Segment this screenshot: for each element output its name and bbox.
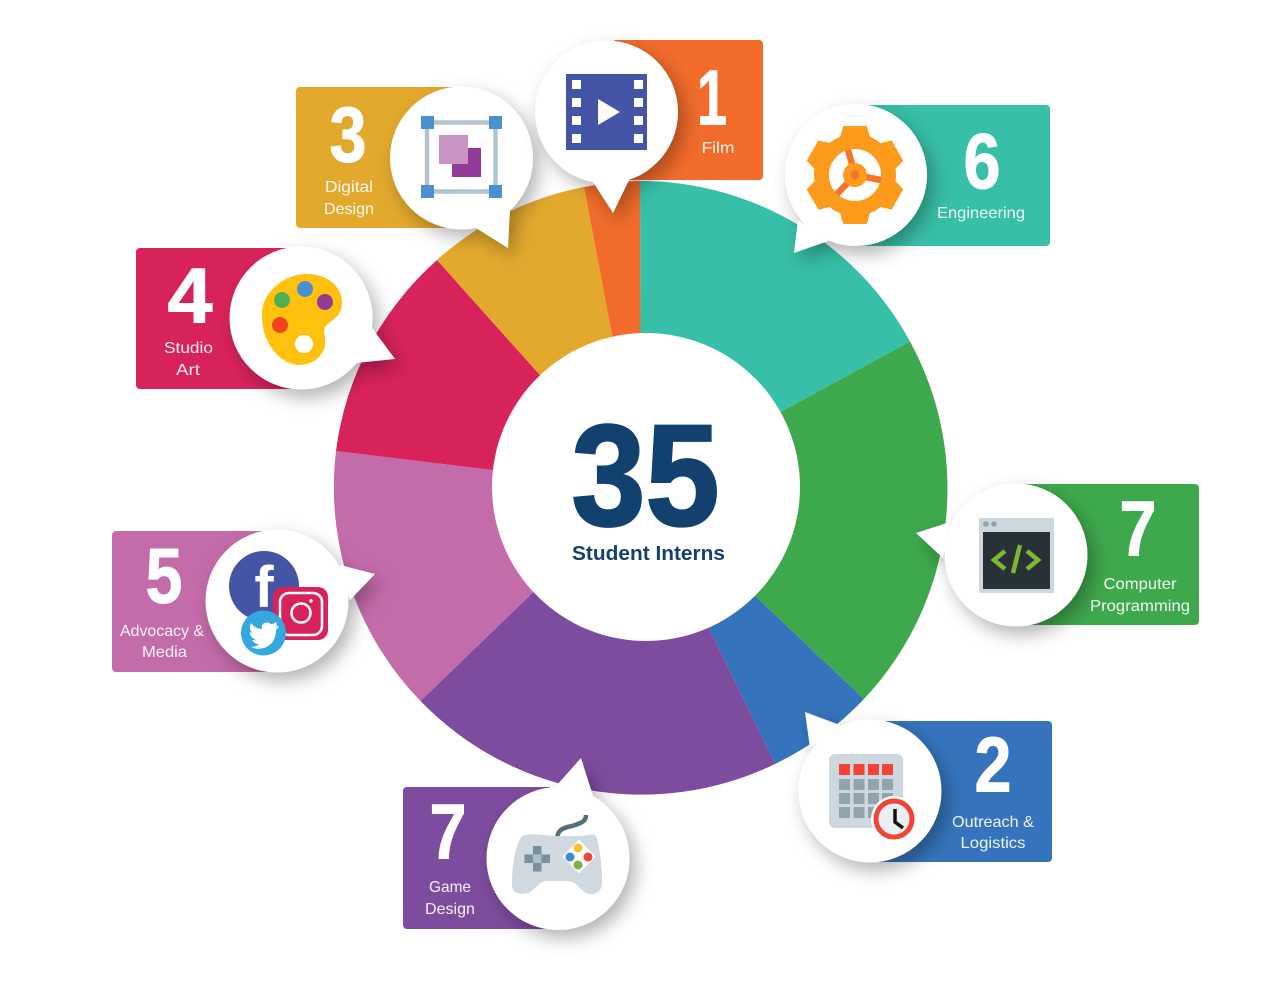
panel: advocacy and media: Advocacy & (120, 623, 204, 640)
panel: game design: 7 (430, 788, 466, 876)
bubble (390, 86, 533, 248)
panel: engineering (785, 104, 1050, 253)
panel: advocacy and media: 5 (146, 532, 182, 620)
panel: computer programming: 7 (1120, 484, 1156, 572)
panel: film: 1 (697, 54, 727, 142)
bubble (206, 530, 375, 672)
bubble (486, 758, 630, 930)
icon: social media logos (229, 551, 328, 656)
icon: paint palette (262, 274, 342, 365)
total label: Student Interns (572, 543, 725, 565)
panel: outreach and logistics: Outreach & (952, 814, 1034, 831)
panel: advocacy and media (112, 530, 375, 672)
slice: outreach and logistics (641, 488, 864, 764)
slice: studio art (336, 260, 641, 488)
slice: engineering (640, 181, 910, 488)
panel: digital design (296, 86, 533, 248)
slice: advocacy and media (334, 451, 641, 701)
panel: advocacy and media: Media (142, 644, 187, 661)
icon: gear (806, 127, 904, 223)
icon: vector shapes (421, 116, 502, 198)
panel: digital design: Digital (325, 179, 373, 196)
icon: calendar with clock (829, 754, 917, 842)
bubble (535, 40, 678, 213)
bubble (230, 246, 395, 390)
slice: film (584, 181, 641, 488)
panel: studio art: 4 (168, 252, 212, 340)
panel: game design: Game (429, 879, 471, 896)
panel: computer programming (916, 484, 1199, 626)
bubble (916, 484, 1088, 626)
panel: digital design: 3 (330, 90, 366, 178)
slice: digital design (437, 187, 641, 488)
total number: 35 (572, 395, 720, 556)
icon: film strip with play (566, 74, 647, 150)
panel: studio art (136, 246, 395, 390)
panel: studio art: Studio (164, 340, 213, 357)
panel: game design (403, 758, 630, 930)
panel: engineering: 6 (964, 117, 1000, 205)
panel: game design: Design (425, 901, 475, 918)
panel: computer programming: Computer (1104, 576, 1177, 593)
panel: outreach and logistics: Logistics (960, 835, 1026, 852)
panel: outreach and logistics: 2 (974, 720, 1012, 808)
panel: digital design: Design (324, 201, 374, 218)
bubble (798, 712, 942, 862)
icon: code window (979, 518, 1054, 593)
panel: engineering: Engineering (937, 205, 1025, 222)
panel: film: Film (702, 140, 734, 157)
center total (492, 333, 800, 641)
slice: computer programming (641, 342, 947, 699)
donut chart: 35 interns by field (334, 181, 947, 795)
icon: social media logos: f (254, 555, 274, 620)
panel: film (535, 40, 763, 213)
panel: studio art: Art (176, 362, 201, 379)
icon: game controller (512, 815, 602, 894)
bubble (785, 104, 927, 253)
panel: computer programming: Programming (1090, 598, 1190, 615)
slice: game design (420, 488, 775, 795)
panel: outreach and logistics (798, 712, 1052, 862)
